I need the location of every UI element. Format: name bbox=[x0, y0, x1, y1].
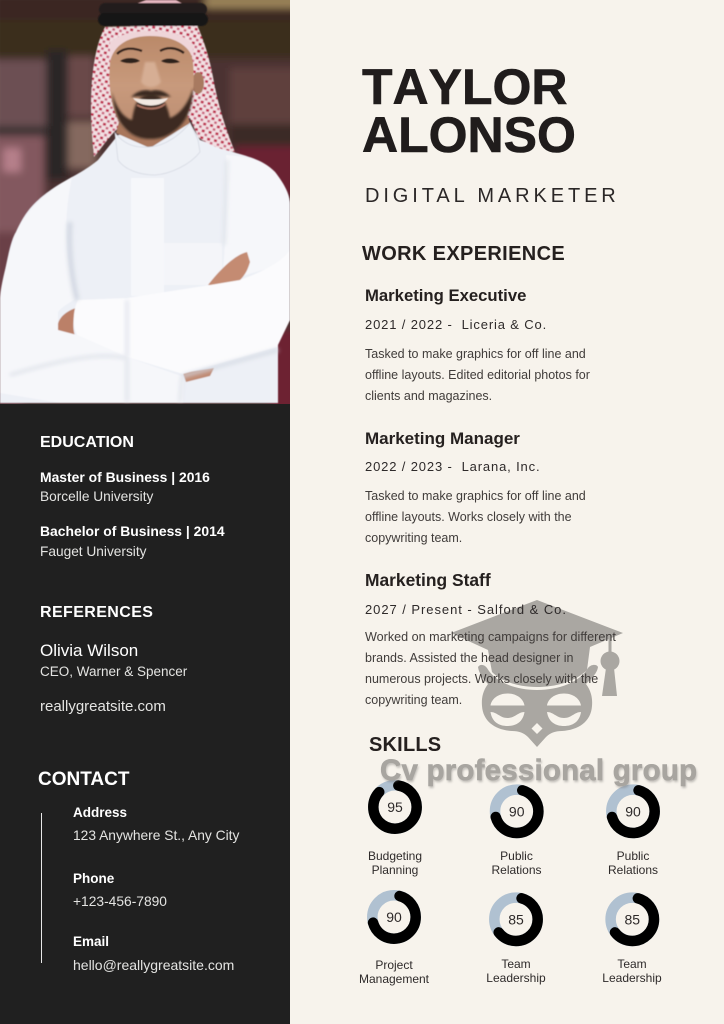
ring: 85 team leadership second: 85 bbox=[625, 911, 640, 927]
robe base bbox=[0, 123, 290, 403]
job title: DIGITAL MARKETER bbox=[365, 185, 620, 207]
title: ALONSO bbox=[362, 106, 576, 162]
reference entry: reallygreatsite.com bbox=[40, 698, 166, 715]
ring: 95 budgeting planning: 95 bbox=[387, 799, 403, 815]
face bbox=[109, 32, 194, 139]
job entry: marketing manager: Marketing Manager bbox=[365, 429, 520, 448]
skill label bbox=[486, 957, 546, 985]
watermark: graduation owl logo bbox=[451, 600, 623, 747]
job entry: marketing executive: clients and magazines. bbox=[365, 389, 492, 403]
job entry: marketing manager: copywriting team. bbox=[365, 531, 462, 545]
job entry: marketing executive: Marketing Executive bbox=[365, 286, 526, 305]
moustache bbox=[131, 90, 171, 97]
sidebar heading: references: REFERENCES bbox=[40, 604, 153, 621]
contact: phone bbox=[73, 871, 167, 909]
neck bbox=[116, 110, 190, 148]
skill label: Team bbox=[617, 957, 647, 971]
job entry: marketing staff: copywriting team. bbox=[365, 693, 462, 707]
job entry: marketing staff: brands. Assisted the head designer in bbox=[365, 651, 573, 665]
contact: phone: +123-456-7890 bbox=[73, 894, 167, 909]
skill label bbox=[359, 958, 429, 986]
contact: email: hello@reallygreatsite.com bbox=[73, 957, 234, 973]
contact: address bbox=[73, 805, 240, 843]
ring: 90 project management: 90 bbox=[386, 909, 402, 925]
contact: email: Email bbox=[73, 934, 109, 949]
ring: 85 team leadership second bbox=[611, 898, 654, 941]
contact: address: Address bbox=[73, 805, 127, 820]
education entry: master: Master of Business | 2016 bbox=[40, 469, 210, 485]
skill label: Leadership bbox=[602, 971, 662, 985]
contact: address: 123 Anywhere St., Any City bbox=[73, 828, 239, 843]
skill label: Public bbox=[500, 849, 533, 863]
ring: 90 public relations second: 90 bbox=[625, 803, 641, 819]
reference entry: Olivia Wilson bbox=[40, 641, 138, 660]
job entry: marketing executive: Tasked to make graphics for off line and bbox=[365, 347, 586, 361]
right forearm bbox=[74, 250, 290, 374]
contact: email bbox=[73, 934, 234, 973]
skill label bbox=[491, 849, 542, 877]
right shoulder bbox=[222, 155, 290, 282]
beard bbox=[112, 88, 193, 139]
skill label: Team bbox=[501, 957, 531, 971]
hand: left bbox=[58, 308, 76, 338]
skill rings lower row bbox=[489, 892, 660, 946]
owl head bbox=[478, 665, 598, 747]
job entry: marketing manager: Tasked to make graphics for off line and bbox=[365, 489, 586, 503]
job entry: marketing executive bbox=[365, 286, 590, 403]
ring: 95 budgeting planning bbox=[373, 785, 417, 829]
heading: skills: SKILLS bbox=[369, 734, 441, 756]
sidebar heading: contact: CONTACT bbox=[38, 769, 129, 790]
nose bbox=[141, 62, 161, 87]
reference entry bbox=[40, 641, 188, 715]
photo: man in white thobe and red headscarf bbox=[0, 0, 290, 404]
education entry: bachelor bbox=[40, 523, 225, 559]
hand lower bbox=[183, 368, 214, 382]
job entry: marketing staff: 2027 / Present - Salford & Co. bbox=[365, 602, 567, 617]
skill label: Leadership bbox=[486, 971, 546, 985]
ring: 85 team leadership: 85 bbox=[508, 911, 524, 927]
watermark text: Cv professional group bbox=[380, 754, 697, 787]
job entry: marketing executive: 2021 / 2022 - Liceria & Co. bbox=[365, 317, 547, 332]
skill label: Relations bbox=[608, 863, 658, 877]
collar bbox=[115, 123, 200, 175]
ring: 90 project management bbox=[372, 895, 416, 939]
skill rings chart bbox=[367, 780, 660, 944]
title bbox=[362, 58, 576, 162]
skill label: Project bbox=[375, 958, 413, 972]
skill label bbox=[602, 957, 662, 985]
ring: 85 team leadership bbox=[494, 898, 538, 941]
education entry: bachelor: Bachelor of Business | 2014 bbox=[40, 523, 225, 539]
education entry: master bbox=[40, 469, 210, 504]
job entry: marketing executive: offline layouts. Edited editorial photos for bbox=[365, 368, 590, 382]
contact divider line bbox=[40, 813, 42, 963]
job entry: marketing staff bbox=[365, 570, 616, 707]
contact: phone: Phone bbox=[73, 871, 114, 886]
tassel bbox=[608, 633, 612, 652]
skill label: Management bbox=[359, 972, 429, 986]
ring: 90 public relations second bbox=[611, 790, 655, 833]
education entry: bachelor: Fauget University bbox=[40, 544, 146, 559]
panel: dark sidebar bbox=[0, 403, 290, 1024]
mouth bbox=[133, 98, 168, 106]
left arm sleeve bbox=[0, 177, 184, 403]
skill label: Relations bbox=[491, 863, 542, 877]
reference entry: CEO, Warner & Spencer bbox=[40, 664, 187, 679]
job entry: marketing manager: 2022 / 2023 - Larana, Inc. bbox=[365, 459, 540, 474]
heading: work experience: WORK EXPERIENCE bbox=[362, 243, 565, 265]
skill label: Planning bbox=[372, 863, 418, 877]
sidebar heading: education: EDUCATION bbox=[40, 434, 134, 451]
title: TAYLOR bbox=[362, 58, 568, 114]
job entry: marketing manager bbox=[365, 429, 586, 545]
hair edge bbox=[110, 31, 194, 62]
cap bbox=[451, 600, 623, 687]
placket bbox=[131, 178, 164, 296]
ear bbox=[192, 72, 204, 94]
skill label bbox=[608, 849, 658, 877]
skill label: Budgeting bbox=[368, 849, 422, 863]
job entry: marketing staff: Marketing Staff bbox=[365, 570, 491, 590]
pocket bbox=[164, 243, 222, 285]
hand: right bbox=[208, 252, 250, 285]
job entry: marketing staff: Worked on marketing campaigns for different bbox=[365, 630, 616, 644]
brows and eyes bbox=[117, 49, 142, 54]
skill label bbox=[368, 849, 422, 877]
education entry: master: Borcelle University bbox=[40, 489, 153, 504]
job entry: marketing manager: offline layouts. Works closely with the bbox=[365, 510, 572, 524]
job entry: marketing staff: numerous projects. Works closely with the bbox=[365, 672, 598, 686]
agal headband bbox=[99, 3, 207, 16]
skill label: Public bbox=[617, 849, 649, 863]
scarf bbox=[91, 25, 235, 157]
ring: 90 public relations: 90 bbox=[509, 803, 525, 819]
ring: 90 public relations bbox=[495, 790, 538, 833]
